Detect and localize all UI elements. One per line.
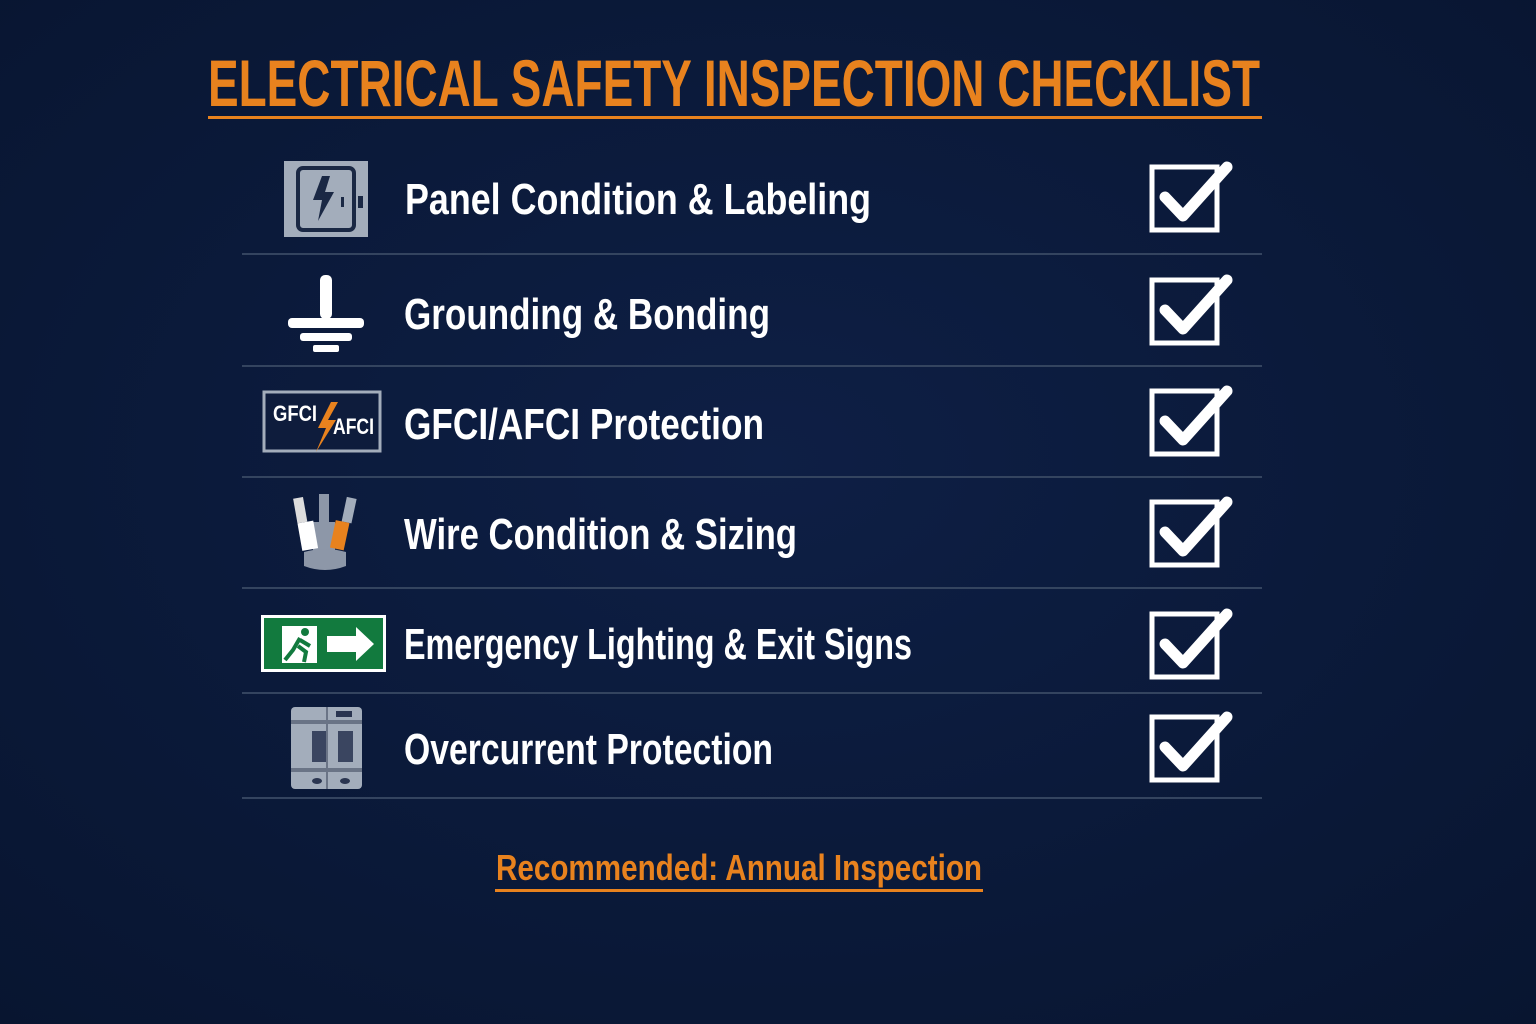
icon: GFCI/AFCI: GFCI: [273, 401, 317, 426]
icon: GFCI/AFCI: AFCI: [333, 414, 374, 439]
icon: breaker: [291, 707, 362, 789]
footer note: Recommended: Annual Inspection: [496, 847, 982, 888]
item 6 text: Overcurrent Protection: [404, 725, 773, 774]
item 1 text: Panel Condition & Labeling: [405, 175, 871, 224]
icon: wires: [293, 494, 357, 570]
item 5 text: Emergency Lighting & Exit Signs: [404, 620, 912, 669]
icon: electrical panel: [284, 161, 368, 237]
item 2 text: Grounding & Bonding: [404, 290, 770, 339]
icon: GFCI/AFCI: [264, 392, 380, 452]
icon: ground symbol: [288, 275, 364, 352]
icon: exit sign: [261, 615, 386, 672]
item 3 text: GFCI/AFCI Protection: [404, 400, 764, 449]
checkboxes: [1152, 167, 1227, 780]
item 4 text: Wire Condition & Sizing: [404, 510, 797, 559]
